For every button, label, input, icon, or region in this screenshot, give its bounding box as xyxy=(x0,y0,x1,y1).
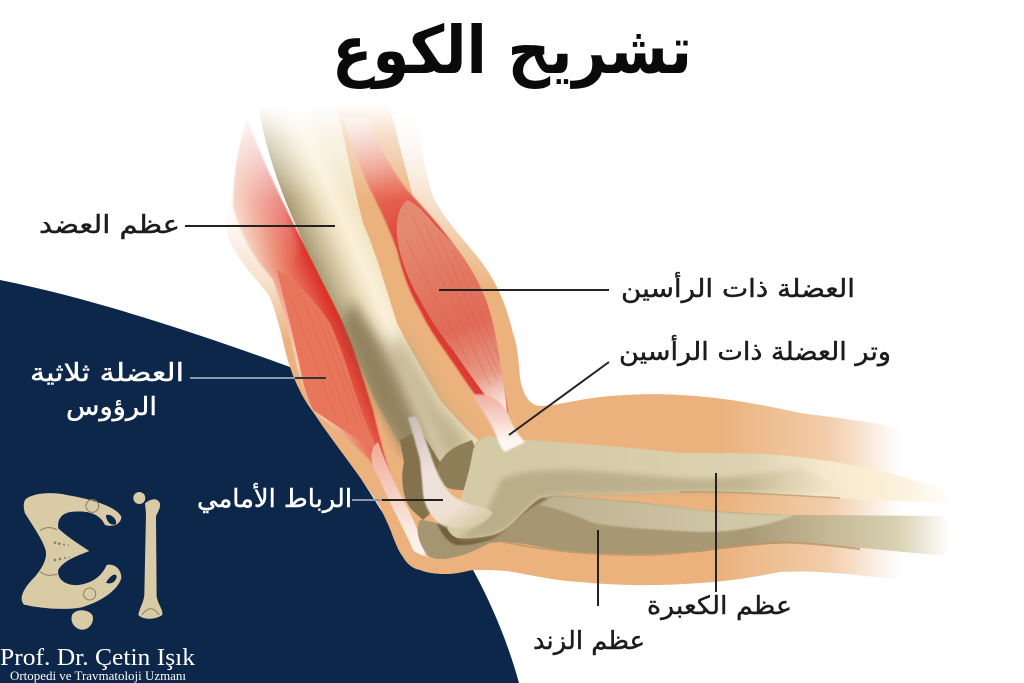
label: biceps tendon: وتر العضلة ذات الرأسين xyxy=(619,334,891,367)
anterior ligament xyxy=(408,416,493,528)
title: تشريح الكوع xyxy=(332,12,692,90)
label: humerus: عظم العضد xyxy=(39,210,180,240)
label: biceps muscle: العضلة ذات الرأسين xyxy=(621,271,855,303)
icon: femur xyxy=(138,499,162,619)
skin silhouette xyxy=(226,100,900,585)
triceps muscle xyxy=(225,110,433,558)
background: navy circle xyxy=(0,280,519,683)
humerus bone xyxy=(258,100,478,520)
arm illustration xyxy=(210,90,963,600)
logo: bones icon xyxy=(22,492,162,630)
logo text xyxy=(0,644,196,683)
label: biceps tendon xyxy=(509,334,891,435)
logo text: Prof. Dr. Çetin Işık xyxy=(0,644,196,671)
icon: patella xyxy=(71,610,93,630)
biceps tendon xyxy=(472,394,525,452)
label: triceps muscle xyxy=(30,358,326,422)
label: ulna xyxy=(533,530,645,656)
label: ulna: عظم الزند xyxy=(533,626,645,656)
ulna bone xyxy=(418,495,958,559)
label: radius: عظم الكعبرة xyxy=(647,591,792,621)
label: triceps muscle: العضلة ثلاثية xyxy=(30,358,184,387)
biceps muscle xyxy=(343,118,508,420)
icon: pelvis xyxy=(22,493,121,609)
top fade xyxy=(215,92,455,202)
skin fades xyxy=(210,90,910,600)
icon: femoral head xyxy=(133,492,145,504)
label: triceps muscle: الرؤوس xyxy=(66,392,157,422)
radius bone xyxy=(447,436,963,538)
label: anterior ligament: الرباط الأمامي xyxy=(197,482,352,513)
logo text: Ortopedi ve Travmatoloji Uzmanı xyxy=(10,669,187,683)
